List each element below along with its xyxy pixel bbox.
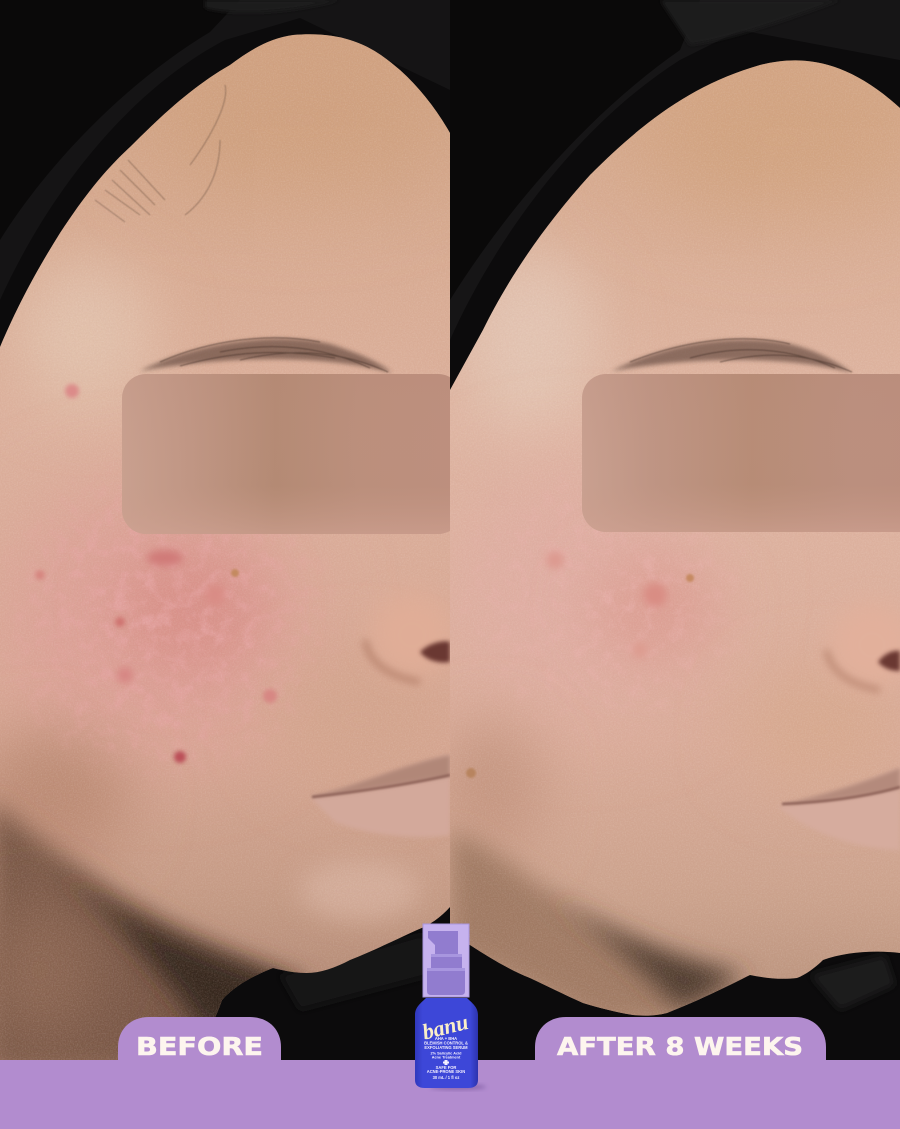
lips [314,778,450,837]
product name: EXFOLIATING SERUM [424,1045,468,1050]
photo: before, left half [0,0,462,1070]
label: before [118,1017,281,1061]
product: serum bottle [415,924,486,1090]
product name: Acne Treatment [432,1056,461,1060]
headband fold [450,0,900,340]
headband fold [0,0,450,300]
pump [427,931,465,995]
label: after 8 weeks: AFTER 8 WEEKS [557,1032,803,1061]
acne redness [605,564,682,630]
label: after 8 weeks [535,1017,826,1061]
product name [424,1036,468,1080]
neck and jaw shadow [0,800,310,1070]
eyebrow [140,339,392,373]
eye blur rectangle [582,374,900,532]
pump shading [427,954,465,971]
acne redness [78,542,266,719]
neck and jaw shadow [450,830,740,1020]
product name: SAFE FOR [436,1065,456,1070]
eyebrow [612,340,852,373]
acne marks [643,583,667,607]
temple hair [95,85,226,222]
acne spots [65,384,79,398]
brand: banu [420,1009,471,1044]
face skin, before [0,0,454,1070]
product name: BLEMISH CONTROL & [424,1040,468,1046]
product name: 30 mL / 1 fl oz [433,1075,459,1080]
product name: AHA + BHA [435,1036,457,1041]
bottle body [415,998,478,1088]
product name: ACNE-PRONE SKIN [427,1069,465,1074]
nose [845,622,896,674]
nose [380,608,438,670]
product name: 2% Salicylic Acid [431,1052,462,1056]
label: before: BEFORE [136,1032,263,1061]
bottom band [0,1060,900,1129]
plus mark [443,1060,449,1065]
photo: after, right half [440,0,900,1060]
clear cap [423,924,469,997]
lips [782,791,900,850]
face skin, after [450,60,900,1016]
eye blur rectangle [122,374,462,534]
